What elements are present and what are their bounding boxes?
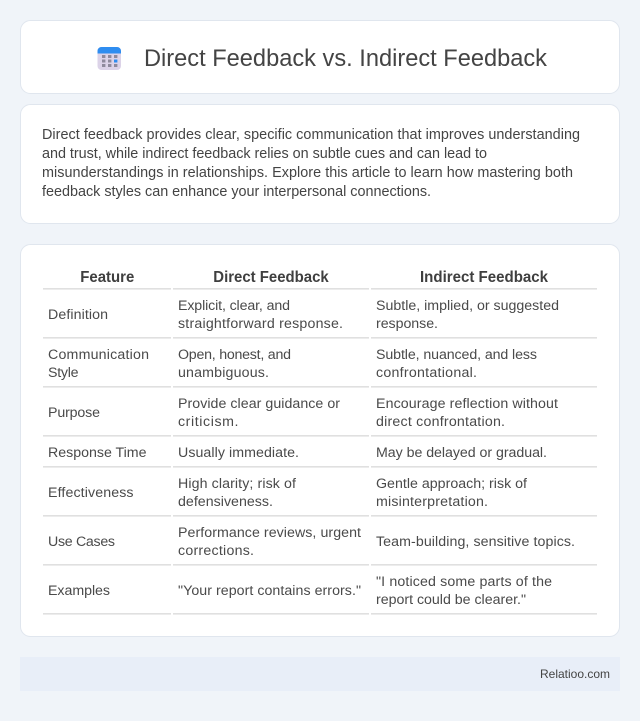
row: effectiveness: High clarity; risk of [178, 476, 296, 492]
row: purpose: Purpose [48, 405, 100, 421]
footer brand: Relatioo.com [540, 667, 610, 681]
row: effectiveness: misinterpretation. [376, 494, 488, 510]
intro text: misunderstandings in relationships. Explore this article to learn how mastering both [42, 165, 573, 181]
row: communication style [48, 347, 537, 381]
row: use cases: Performance reviews, urgent [178, 525, 361, 541]
title: Direct Feedback vs. Indirect Feedback [144, 45, 548, 72]
row: response time [48, 445, 547, 461]
intro text [42, 127, 580, 200]
header panel [20, 20, 620, 94]
row: definition: Definition [48, 307, 108, 323]
row: definition: Explicit, clear, and [178, 298, 290, 314]
table header: Feature [80, 269, 134, 286]
row: purpose: Provide clear guidance or [178, 396, 340, 412]
row: communication style: unambiguous. [178, 365, 269, 381]
row: examples: report could be clearer." [376, 592, 526, 608]
intro panel [20, 104, 620, 224]
row: use cases [48, 525, 575, 559]
intro text: Direct feedback provides clear, specific communication that improves understanding [42, 127, 580, 143]
row: definition: straightforward response. [178, 316, 343, 332]
footer bar [20, 657, 620, 691]
row: examples: Examples [48, 583, 110, 599]
row: effectiveness [48, 476, 527, 510]
intro text: feedback styles can enhance your interpersonal connections. [42, 184, 431, 200]
row: effectiveness: Effectiveness [48, 485, 134, 501]
row: purpose: Encourage reflection without [376, 396, 558, 412]
comparison table [43, 269, 597, 615]
intro text: and trust, while indirect feedback relies on subtle cues and can lead to [42, 146, 487, 162]
row: communication style: Open, honest, and [178, 347, 291, 363]
table header [80, 269, 548, 286]
row: examples: "I noticed some parts of the [376, 574, 552, 590]
row: purpose: criticism. [178, 414, 238, 430]
row: use cases: corrections. [178, 543, 254, 559]
row: purpose: direct confrontation. [376, 414, 505, 430]
row: response time: Usually immediate. [178, 445, 299, 461]
row: examples [48, 574, 552, 608]
row: communication style: Subtle, nuanced, and less [376, 347, 537, 363]
row: communication style: confrontational. [376, 365, 477, 381]
row: examples: "Your report contains errors." [178, 583, 361, 599]
row: use cases: Use Cases [48, 534, 115, 550]
icon: calendar [98, 47, 121, 70]
row: definition: response. [376, 316, 438, 332]
row: effectiveness: defensiveness. [178, 494, 273, 510]
table panel [20, 244, 620, 636]
row: response time: Response Time [48, 445, 147, 461]
table header: Direct Feedback [213, 269, 329, 286]
row: definition [48, 298, 559, 332]
row: communication style: Style [48, 365, 79, 381]
row: communication style: Communication [48, 347, 149, 363]
row: response time: May be delayed or gradual. [376, 445, 547, 461]
table header: Indirect Feedback [420, 269, 548, 286]
row: purpose [48, 396, 558, 430]
row: definition: Subtle, implied, or suggested [376, 298, 559, 314]
row: use cases: Team-building, sensitive topics. [376, 534, 575, 550]
row: effectiveness: Gentle approach; risk of [376, 476, 527, 492]
